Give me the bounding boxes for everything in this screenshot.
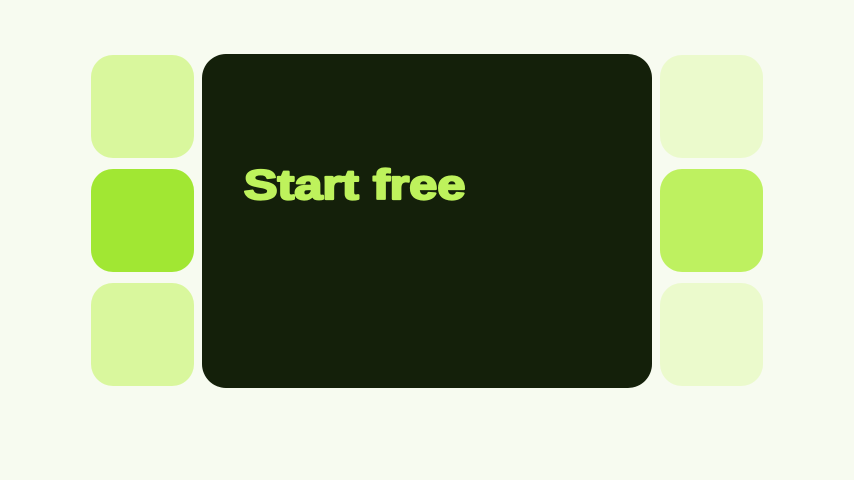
panel: right top tile [660, 55, 763, 158]
panel: left middle tile [91, 169, 194, 272]
heading: Start free: Start free [244, 161, 465, 208]
panel: right bottom tile [660, 283, 763, 386]
panel: right middle tile [660, 169, 763, 272]
panel: left bottom tile [91, 283, 194, 386]
panel: main dark card [202, 54, 652, 388]
panel: left top tile [91, 55, 194, 158]
